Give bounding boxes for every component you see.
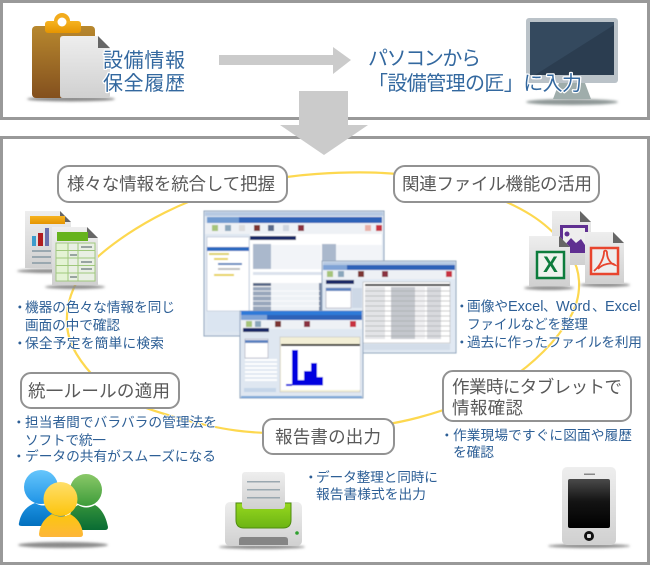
heading: equipment information: 設備情報 [103,49,185,72]
text: related files points: 、 [592,299,606,314]
heading: enter into software: 「設備管理の匠」に入力 [368,72,582,95]
callout: report output [263,419,394,454]
text: related files points: 過去に作ったファイルを利用 [467,335,642,350]
icon: chart and table documents [17,211,105,289]
text: integrate information points: ・ [13,300,27,315]
heading: enter into software: パソコンから [368,48,481,70]
text: unified rules points: ソフトで統一 [25,433,106,448]
icon: printer [219,472,305,549]
text: report output points: 報告書様式を出力 [316,487,426,502]
yellow connecting ring [67,172,579,433]
icon: tablet [548,467,630,548]
screenshots of software [204,211,456,398]
callout: tablet confirmation: 作業時にタブレットで [452,377,622,397]
text: unified rules points [12,415,217,464]
window: chart report [240,311,363,398]
callout: related files: 関連ファイル機能の活用 [402,174,592,194]
window: inspection history list [322,261,456,353]
text: related files points: Word [556,299,590,315]
text: report output points: ・ [304,470,318,485]
text: unified rules points: ・ [12,415,26,430]
icon: image, Excel and PDF files [524,211,630,290]
text: tablet confirmation points [440,428,632,460]
text: related files points: ・ [455,335,469,350]
text: related files points: ファイルなどを整理 [467,317,588,332]
callout: report output: 報告書の出力 [275,427,381,447]
text: unified rules points: データの共有がスムーズになる [25,448,216,464]
callout: related files [394,166,599,202]
text: unified rules points: 担当者間でバラバラの管理法を [25,415,217,430]
heading: equipment information: 保全履歴 [103,72,185,95]
heading: enter into software [368,48,582,95]
text: related files points: Excel [605,299,640,315]
window: equipment information [204,211,384,336]
text: unified rules points: ・ [12,449,26,464]
text: integrate information points [13,300,175,351]
text: integrate information points: 機器の色々な情報を同じ [25,300,175,315]
callout: unified rules: 統一ルールの適用 [28,381,170,401]
callout: integrate information [58,166,287,202]
callout: integrate information: 様々な情報を統合して把握 [67,174,275,194]
bar chart [286,350,323,386]
icon: image, Excel and PDF files: X [543,252,558,277]
callout: unified rules [21,373,179,408]
text: integrate information points: 画面の中で確認 [25,318,120,333]
text: related files points: 、 [543,299,557,314]
text: report output points [304,469,438,502]
text: related files points: Excel [508,299,543,315]
heading: equipment information [103,49,185,95]
text: related files points [455,299,642,350]
icon: three people [18,470,108,548]
panel: input step [2,2,648,118]
icon: clipboard with paper [27,13,115,102]
text: integrate information points: ・ [13,336,27,351]
panel: software features [2,138,648,564]
text: related files points: 画像や [467,299,508,314]
text: report output points: データ整理と同時に [316,469,438,485]
text: tablet confirmation points: を確認 [453,445,494,460]
text: tablet confirmation points: 作業現場ですぐに図面や履歴 [453,428,632,443]
callout: tablet confirmation [443,371,631,421]
arrow: horizontal step arrow [219,47,351,74]
arrow: down to features [280,91,368,155]
text: integrate information points: 保全予定を簡単に検索 [25,336,164,351]
callout: tablet confirmation: 情報確認 [452,398,524,418]
text: tablet confirmation points: ・ [440,428,454,443]
text: related files points: ・ [455,299,469,314]
icon: desktop monitor [526,18,618,105]
